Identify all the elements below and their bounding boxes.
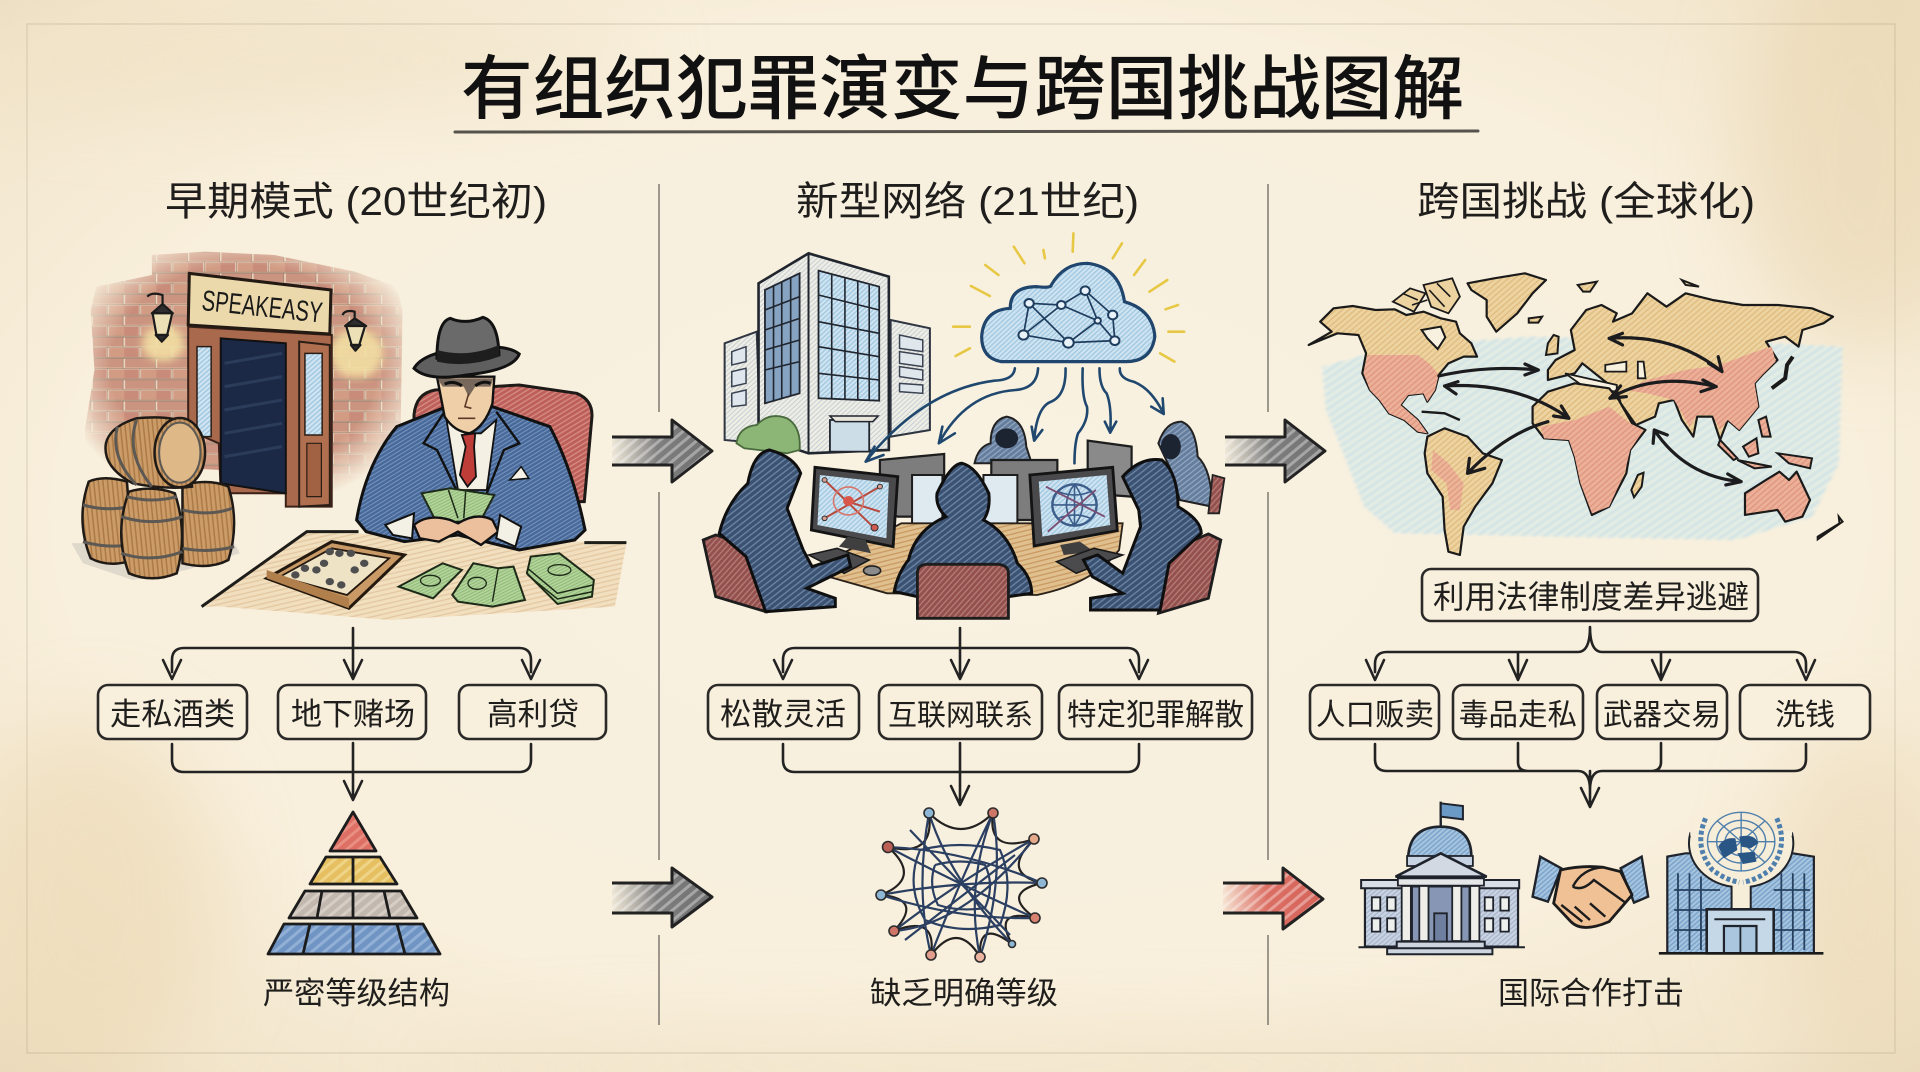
box 走私酒类 bbox=[98, 685, 247, 739]
barrel left bbox=[82, 478, 133, 564]
box 互联网联系 bbox=[879, 685, 1042, 739]
box 洗钱: 洗钱 bbox=[1775, 699, 1835, 732]
flow tree column 3 bottom bbox=[1375, 743, 1806, 807]
back hooded figure mid bbox=[975, 417, 1032, 463]
money pile 1 bbox=[399, 563, 462, 598]
box 武器交易 bbox=[1597, 685, 1727, 739]
right chair bbox=[1158, 534, 1221, 613]
box 地下赌场: 地下赌场 bbox=[291, 697, 415, 732]
table top bbox=[202, 532, 626, 620]
column dividers bbox=[659, 184, 1268, 1025]
flow tree column 1 bottom bbox=[172, 743, 531, 800]
UK Iceland and islands bbox=[1529, 280, 1699, 355]
side window left bbox=[197, 347, 211, 437]
bills in hand bbox=[422, 488, 494, 523]
illustration: hooded network bbox=[703, 233, 1224, 618]
flow tree column 2 bottom bbox=[783, 743, 1139, 805]
label 缺乏明确等级: 缺乏明确等级 bbox=[870, 976, 1058, 1011]
spider web icon bbox=[876, 808, 1047, 962]
money pile 2 bbox=[452, 563, 525, 607]
Asia heat bbox=[1624, 347, 1776, 430]
flow arrow red bottom right bbox=[1223, 868, 1323, 929]
box 武器交易: 武器交易 bbox=[1603, 699, 1721, 732]
flow tree column 1 top bbox=[163, 628, 540, 679]
left chair bbox=[703, 535, 766, 612]
data arrows bbox=[866, 368, 1164, 463]
door opening bbox=[221, 338, 286, 493]
handshake bbox=[1533, 857, 1648, 927]
box 毒品走私 bbox=[1453, 685, 1583, 739]
keyboards bbox=[809, 548, 1123, 573]
entrance bbox=[830, 420, 869, 452]
pyramid top tier bbox=[330, 812, 376, 851]
Eurasia bbox=[1548, 293, 1833, 440]
UN building bbox=[1659, 812, 1823, 953]
sign text: SPEAKEASY bbox=[200, 285, 324, 330]
sign board bbox=[188, 273, 331, 334]
flow arrow gray bottom left bbox=[612, 868, 712, 927]
illustration: speakeasy and boss bbox=[71, 252, 626, 620]
ocean hatching bbox=[1322, 337, 1843, 540]
barrel right bbox=[182, 482, 234, 566]
box 特定犯罪解散 bbox=[1059, 685, 1252, 739]
box 特定犯罪解散: 特定犯罪解散 bbox=[1067, 699, 1244, 732]
pocket square bbox=[510, 467, 529, 480]
center hooded figure bbox=[894, 463, 1032, 597]
side building left bbox=[725, 332, 760, 443]
barrel top on side bbox=[105, 417, 192, 488]
lapels bbox=[424, 412, 519, 493]
box 人口贩卖 bbox=[1310, 685, 1439, 739]
box 高利贷 bbox=[459, 685, 606, 739]
top box: exploit legal differences: 利用法律制度差异逃避 bbox=[1433, 579, 1749, 615]
box 高利贷: 高利贷 bbox=[487, 697, 579, 732]
left hooded figure bbox=[719, 450, 851, 612]
box 走私酒类: 走私酒类 bbox=[110, 697, 235, 732]
face bbox=[437, 377, 494, 433]
door frame bbox=[188, 327, 332, 507]
lamp right bbox=[342, 311, 366, 351]
illustration: world map with arrows bbox=[1309, 273, 1843, 555]
Australia bbox=[1745, 472, 1810, 522]
box 人口贩卖: 人口贩卖 bbox=[1316, 699, 1434, 732]
barrel front bbox=[121, 489, 182, 578]
Greenland bbox=[1468, 273, 1546, 332]
South America bbox=[1425, 428, 1502, 555]
Arctic islands bbox=[1393, 278, 1460, 313]
lamp glow bbox=[142, 325, 383, 378]
Central America islands bbox=[1422, 412, 1460, 420]
suit bbox=[357, 407, 585, 550]
side building right bbox=[891, 320, 930, 437]
money stack 3 bbox=[527, 553, 594, 604]
shirt bbox=[447, 420, 496, 490]
flow arrow gray top right bbox=[1225, 420, 1325, 482]
label 严密等级结构: 严密等级结构 bbox=[263, 976, 450, 1011]
lamp left bbox=[147, 294, 173, 342]
hat bbox=[414, 347, 519, 377]
main building windows left bbox=[765, 273, 800, 403]
UN emblem bbox=[1701, 812, 1782, 882]
pyramid icon bbox=[268, 812, 440, 954]
Africa heat bbox=[1540, 407, 1644, 513]
web nodes bbox=[876, 808, 1047, 962]
back hooded figure right bbox=[1158, 422, 1212, 507]
web outer arcs bbox=[881, 813, 1042, 957]
tie bbox=[460, 433, 476, 487]
sun rays bbox=[953, 233, 1184, 362]
Africa bbox=[1533, 383, 1645, 515]
floor shadow bbox=[71, 540, 240, 580]
South America heat bbox=[1431, 450, 1464, 510]
box 松散灵活 bbox=[708, 685, 859, 739]
box 互联网联系: 互联网联系 bbox=[888, 699, 1033, 732]
New Zealand bbox=[1818, 517, 1843, 539]
center chair bbox=[917, 564, 1008, 618]
main building windows right bbox=[819, 271, 879, 401]
right window bbox=[305, 353, 322, 435]
bush bbox=[736, 416, 800, 453]
pyramid base tier bbox=[268, 924, 440, 954]
route arrows bbox=[1439, 333, 1741, 485]
title underline bbox=[455, 131, 1478, 132]
label 国际合作打击: 国际合作打击 bbox=[1498, 976, 1684, 1011]
pyramid third tier bbox=[289, 891, 417, 918]
government building bbox=[1358, 802, 1525, 954]
box 毒品走私: 毒品走私 bbox=[1459, 699, 1577, 732]
back monitors bbox=[880, 454, 944, 517]
column heading: early: 早期模式 (20世纪初) bbox=[165, 180, 547, 224]
chair bbox=[414, 385, 592, 502]
monitor left bbox=[811, 467, 898, 547]
right hooded figure bbox=[1083, 460, 1201, 610]
monitor right bbox=[1030, 467, 1117, 546]
main building bbox=[759, 253, 889, 453]
column heading: transnational: 跨国挑战 (全球化) bbox=[1417, 180, 1755, 224]
brick wall bbox=[85, 252, 403, 497]
North America bbox=[1309, 306, 1477, 433]
box 洗钱 bbox=[1740, 685, 1870, 739]
Southeast Asia islands bbox=[1718, 417, 1812, 468]
flow tree column 3 top bbox=[1366, 627, 1815, 680]
web inner lines bbox=[881, 813, 1042, 957]
box 地下赌场 bbox=[278, 685, 426, 739]
cloud bbox=[982, 263, 1155, 362]
right door bbox=[299, 342, 330, 507]
column heading: new network: 新型网络 (21世纪) bbox=[796, 180, 1139, 224]
cooperation icons bbox=[1358, 802, 1823, 954]
Hudson bay bbox=[1422, 327, 1445, 349]
cloud network bbox=[1023, 291, 1115, 343]
abacus bbox=[267, 542, 404, 608]
hands bbox=[414, 516, 498, 545]
box 松散灵活: 松散灵活 bbox=[720, 697, 846, 732]
title: 有组织犯罪演变与跨国挑战图解 bbox=[461, 50, 1464, 128]
flow tree column 2 top bbox=[774, 628, 1148, 679]
pyramid second tier bbox=[310, 857, 397, 884]
inland seas bbox=[1565, 362, 1645, 392]
Japan bbox=[1772, 357, 1793, 388]
North America heat bbox=[1363, 355, 1439, 433]
round table bbox=[823, 523, 1123, 595]
top box: exploit legal differences bbox=[1422, 569, 1758, 621]
flow arrow gray top left bbox=[612, 420, 712, 482]
Madagascar bbox=[1631, 473, 1644, 497]
